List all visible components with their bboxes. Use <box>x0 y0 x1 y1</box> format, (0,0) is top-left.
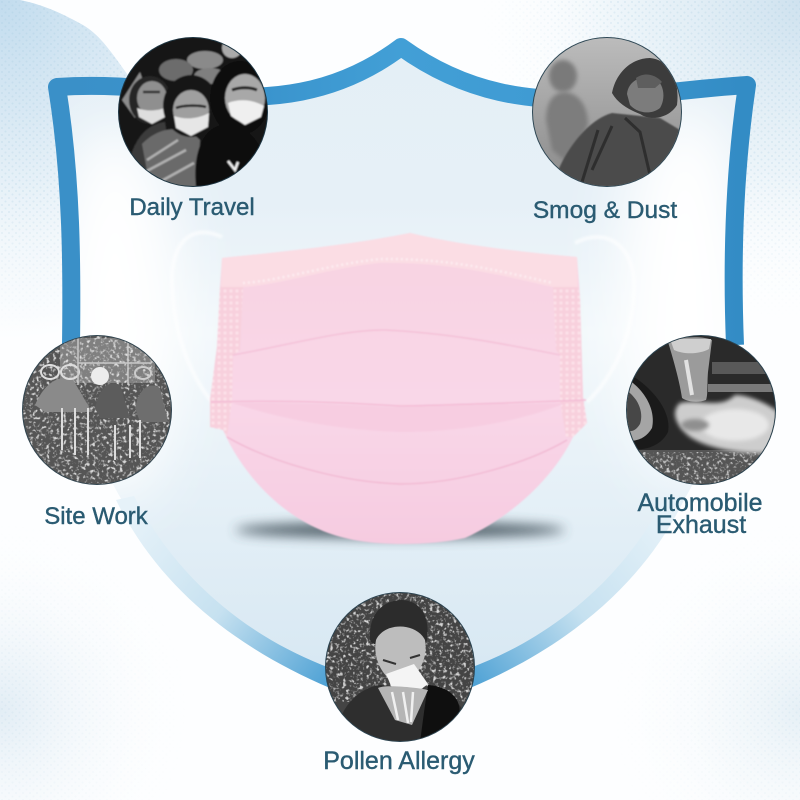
shield side highlights <box>50 100 750 500</box>
left perforated edge <box>210 287 243 437</box>
label: smog and dust: Smog & Dust <box>533 197 677 224</box>
mask outline <box>210 233 587 544</box>
ear loops <box>172 232 634 402</box>
pink mask <box>210 233 587 544</box>
mask shadow <box>235 522 565 538</box>
shield fill <box>57 48 746 690</box>
label: automobile exhaust: Exhaust <box>656 511 746 539</box>
photo: pollen allergy <box>325 592 475 742</box>
photo: smog and dust <box>532 37 685 187</box>
band perforation <box>243 259 553 283</box>
photo: automobile exhaust <box>626 335 782 490</box>
shield lower right edge <box>470 496 684 688</box>
photo: site work <box>22 335 172 485</box>
photo: daily travel <box>118 37 270 187</box>
label: daily travel: Daily Travel <box>129 194 255 221</box>
shield lower left edge <box>116 496 330 688</box>
label: site work: Site Work <box>44 503 149 530</box>
shield <box>50 47 750 690</box>
mask fold shading <box>232 403 566 432</box>
nose band <box>221 233 578 287</box>
mask fold lines <box>211 330 586 484</box>
label: automobile exhaust: Automobile <box>637 489 763 517</box>
right perforated edge <box>553 287 587 437</box>
shield upper outline <box>57 47 747 345</box>
label: pollen allergy: Pollen Allergy <box>323 747 475 775</box>
